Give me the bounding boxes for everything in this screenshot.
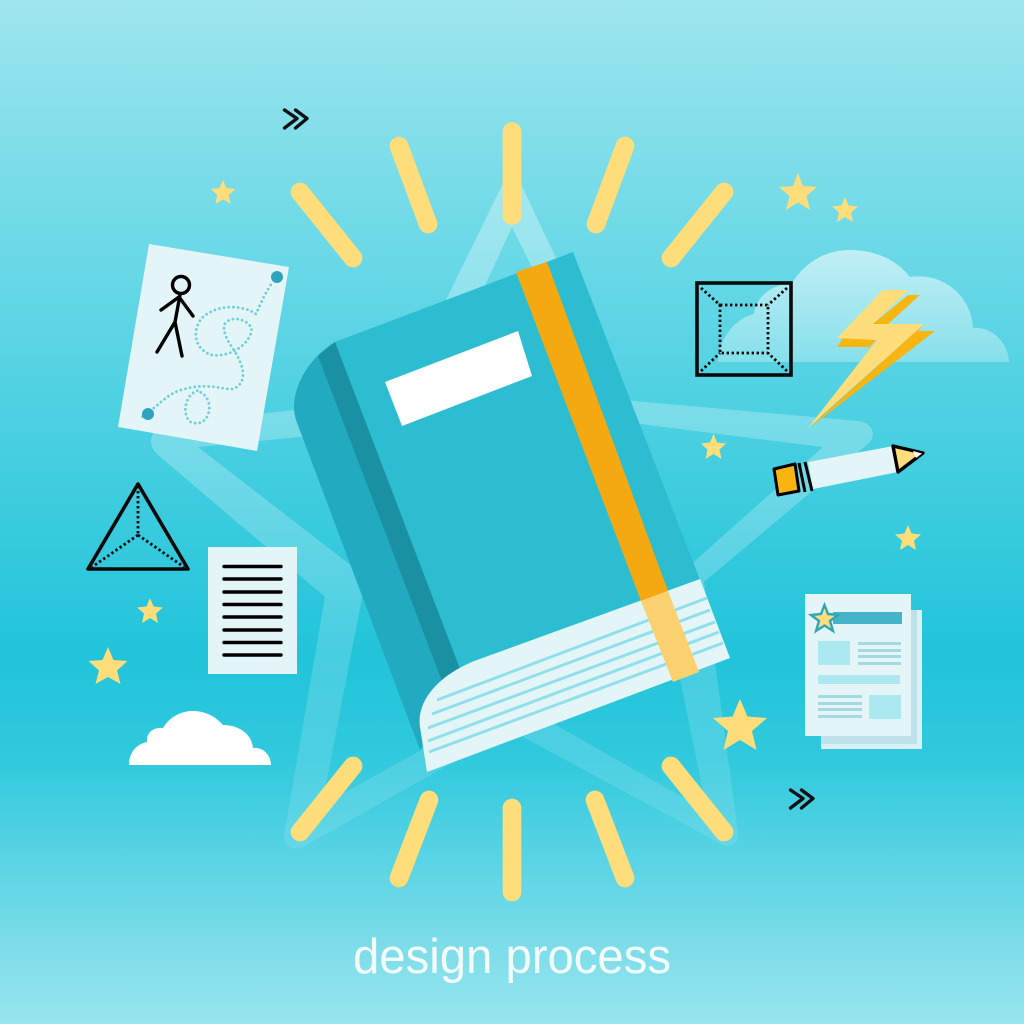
dotted route bbox=[140, 285, 271, 423]
stick figure bbox=[157, 276, 193, 356]
sunburst rays bbox=[300, 132, 724, 892]
large translucent star outline bbox=[151, 165, 873, 849]
bolt shadow bbox=[808, 295, 935, 429]
cover label bbox=[385, 331, 532, 426]
pencil bbox=[774, 446, 923, 495]
document with text lines bbox=[208, 547, 297, 674]
pale band over pages bbox=[641, 591, 699, 682]
route end dots bbox=[271, 271, 283, 283]
book cover bbox=[335, 252, 702, 680]
double chevron top bbox=[284, 110, 307, 128]
page lines bbox=[428, 598, 723, 752]
wireframe cube icon bbox=[697, 283, 791, 375]
bolt face bbox=[808, 290, 924, 428]
pale cloud bbox=[718, 250, 1009, 362]
spine groove bbox=[318, 342, 462, 684]
lightning bolt bbox=[808, 290, 935, 429]
double chevron bottom bbox=[790, 790, 813, 808]
decorative stars bbox=[88, 173, 921, 750]
wireframe pyramid icon bbox=[88, 484, 188, 569]
newsletter pages bbox=[805, 594, 922, 749]
book spine bbox=[294, 342, 470, 750]
sketch paper with figure bbox=[118, 244, 289, 451]
pages bbox=[420, 579, 730, 772]
book bbox=[294, 252, 730, 772]
orange bookmark band bbox=[516, 262, 668, 601]
title: design process bbox=[353, 930, 671, 984]
white cloud bbox=[129, 711, 271, 765]
